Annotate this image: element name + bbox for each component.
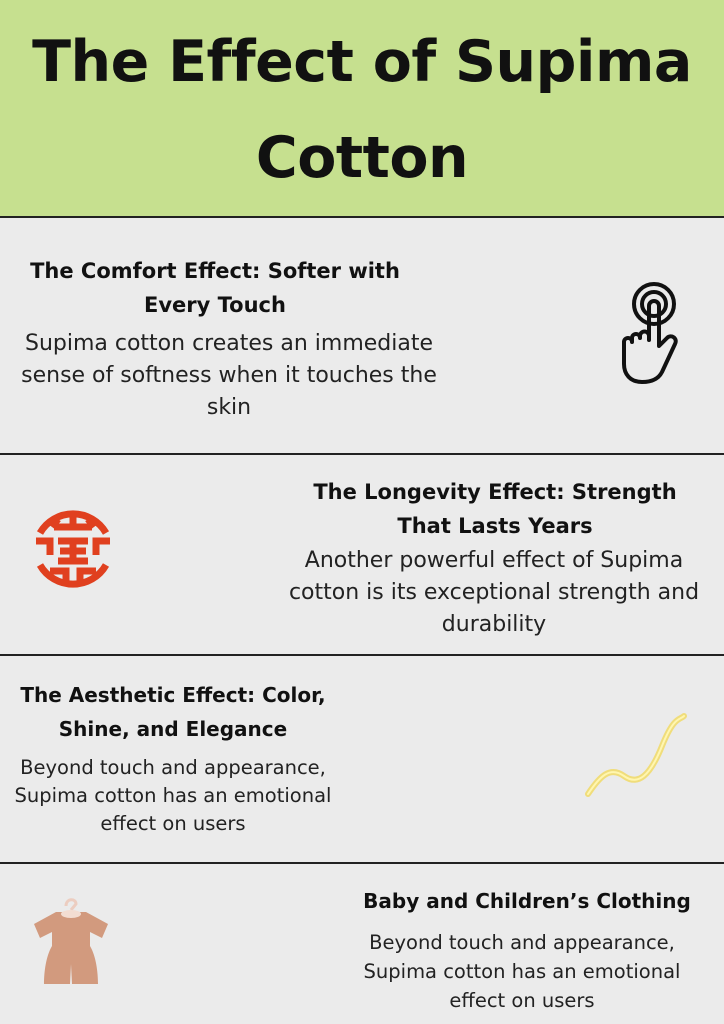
text: baby clothing: Supima cotton has an emotional [364, 960, 680, 983]
icon: golden shine [585, 713, 687, 797]
heading: longevity [313, 480, 677, 538]
text: longevity: durability [442, 612, 546, 637]
icon: baby romper [34, 898, 108, 984]
panel: aesthetic [15, 683, 687, 835]
heading: aesthetic: The Aesthetic Effect: Color, [20, 683, 326, 707]
text: aesthetic [15, 756, 331, 835]
icon: touch hand [622, 282, 678, 384]
title: The Effect of Supima [32, 29, 692, 95]
heading: longevity: The Longevity Effect: Strength [313, 480, 677, 504]
text: baby clothing [364, 931, 680, 1012]
panel: baby clothing [34, 889, 691, 1012]
heading: comfort: The Comfort Effect: Softer with [30, 259, 400, 283]
text: longevity: Another powerful effect of Supima [305, 548, 683, 573]
text: aesthetic: Beyond touch and appearance, [20, 756, 326, 779]
title [32, 29, 692, 191]
heading: aesthetic: Shine, and Elegance [59, 717, 287, 741]
icon: red chinese symbol [36, 510, 110, 588]
text: longevity [289, 548, 699, 637]
heading: aesthetic [20, 683, 326, 741]
heading: comfort [30, 259, 400, 317]
text: longevity: cotton is its exceptional strength and [289, 580, 699, 605]
heading: comfort: Every Touch [144, 293, 286, 317]
panel: longevity [36, 480, 699, 637]
title: Cotton [256, 125, 468, 191]
header banner [0, 0, 724, 216]
panel: comfort [21, 259, 678, 420]
text: comfort [21, 331, 437, 420]
text: comfort: skin [207, 395, 251, 420]
heading: longevity: That Lasts Years [397, 514, 593, 538]
text: aesthetic: Supima cotton has an emotional [15, 784, 331, 807]
text: comfort: sense of softness when it touches the [21, 363, 437, 388]
text: baby clothing: Beyond touch and appearance, [369, 931, 675, 954]
heading: baby clothing: Baby and Children’s Clothing [363, 889, 691, 913]
text: aesthetic: effect on users [100, 812, 246, 835]
text: comfort: Supima cotton creates an immediate [25, 331, 433, 356]
text: baby clothing: effect on users [449, 989, 595, 1012]
